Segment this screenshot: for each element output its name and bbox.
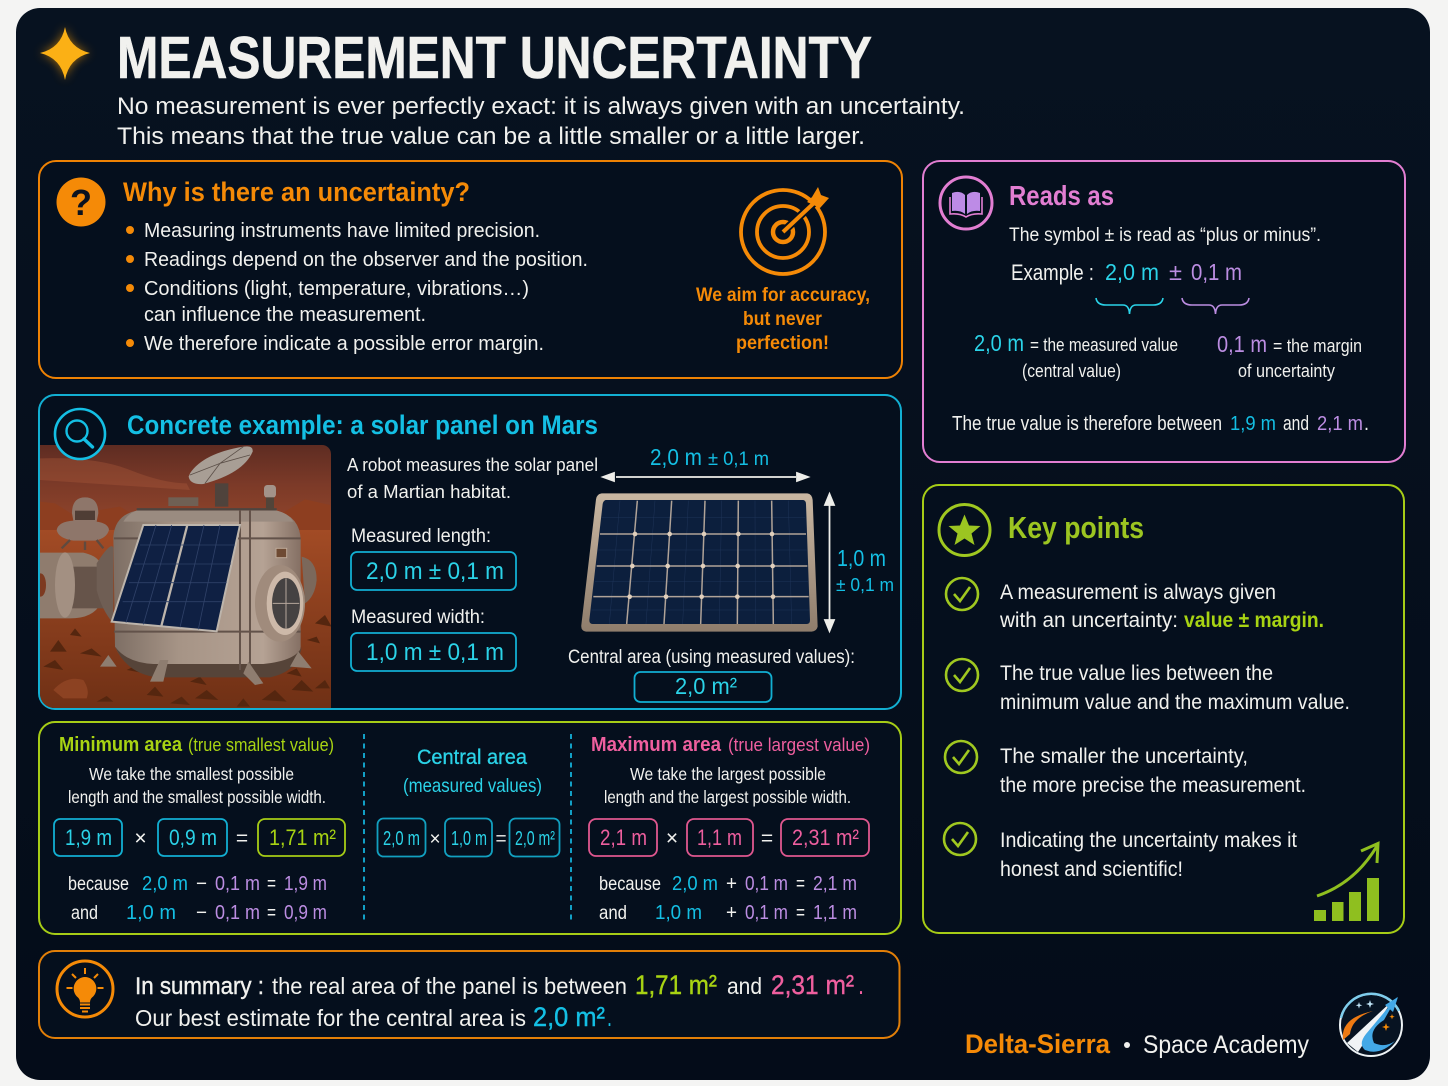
brace: margin xyxy=(1182,298,1249,314)
column: maximum area: = xyxy=(796,902,805,924)
icon: magnifier xyxy=(55,409,105,459)
column: central area: 2,0 m² xyxy=(515,828,555,850)
column: maximum area: 2,1 m xyxy=(813,873,857,895)
panel: minimum, central and maximum area xyxy=(39,722,901,934)
example expression: 2,0 m xyxy=(1105,259,1159,285)
column: minimum area: × xyxy=(134,827,147,850)
key point 1: A measurement is always given xyxy=(1000,581,1276,604)
dimension label: length: ± 0,1 m xyxy=(708,448,769,470)
measured width: Measured width: xyxy=(351,607,485,628)
bullet list of causes: can influence the measurement. xyxy=(144,303,426,326)
true value conclusion: 2,1 m xyxy=(1317,412,1363,435)
icon: question mark xyxy=(56,178,106,226)
column dividers xyxy=(364,734,571,920)
panel: why is there an uncertainty xyxy=(39,161,902,378)
intro text xyxy=(117,93,965,150)
column: minimum area: 0,9 m xyxy=(169,825,217,850)
column: maximum area: 1,0 m xyxy=(655,902,702,924)
summary text: 1,71 m² xyxy=(635,970,717,1000)
column: maximum area: Maximum area xyxy=(591,733,722,756)
column: minimum area: = xyxy=(267,902,276,924)
true value conclusion: . xyxy=(1364,413,1369,435)
column: minimum area: 2,0 m xyxy=(142,873,188,895)
column: minimum area: 0,9 m xyxy=(284,902,327,924)
column: maximum area: × xyxy=(666,827,678,850)
key point 3 xyxy=(945,741,1306,797)
key point 3: the more precise the measurement. xyxy=(1000,774,1306,797)
column: central area xyxy=(378,746,560,856)
icon: question mark: ? xyxy=(70,182,92,223)
definition: measured value: = the measured value xyxy=(1030,334,1178,355)
example expression: ± xyxy=(1169,259,1182,285)
column: maximum area: 1,1 m xyxy=(697,825,742,850)
measured length: Measured length: xyxy=(351,526,491,547)
dimension label: width xyxy=(836,545,894,595)
dimension label: width: 1,0 m xyxy=(837,545,886,571)
summary text: . xyxy=(607,1002,612,1032)
column: minimum area: − xyxy=(196,873,207,895)
definition: margin of uncertainty: = the margin xyxy=(1273,335,1362,356)
column: maximum area: 0,1 m xyxy=(745,873,788,895)
rocks xyxy=(43,615,332,707)
summary text: 2,31 m² xyxy=(771,970,854,1000)
callout: accuracy xyxy=(696,284,870,354)
column: central area: Central area xyxy=(417,746,527,769)
column: maximum area xyxy=(589,733,870,924)
small background module xyxy=(57,497,109,550)
callout: accuracy: but never xyxy=(743,308,822,330)
definition: measured value xyxy=(974,330,1178,381)
central area result xyxy=(568,647,855,702)
panel: key points xyxy=(923,485,1404,933)
column: minimum area: 1,9 m xyxy=(65,825,112,850)
column: central area: 1,0 m xyxy=(451,828,487,850)
callout: accuracy: We aim for accuracy, xyxy=(696,284,870,306)
summary text: . xyxy=(858,970,864,1000)
measured width: 1,0 m ± 0,1 m xyxy=(366,639,504,666)
column: maximum area: and xyxy=(599,903,627,924)
brace: measured value xyxy=(1096,298,1163,314)
column: maximum area: We take the largest possible xyxy=(630,764,826,784)
dimension label: width: ± 0,1 m xyxy=(836,574,894,595)
example expression: 0,1 m xyxy=(1191,259,1242,285)
column: central area: 2,0 m xyxy=(383,828,420,850)
column: maximum area: + xyxy=(726,873,737,895)
key point 1 xyxy=(946,578,1324,632)
column: minimum area: 1,9 m xyxy=(284,873,327,895)
key point 1: with an uncertainty: xyxy=(999,609,1178,632)
porthole xyxy=(255,565,305,642)
column: maximum area: (true largest value) xyxy=(728,734,870,755)
column: minimum area: (true smallest value) xyxy=(188,734,334,755)
example expression xyxy=(1011,259,1242,285)
illustration: Mars habitat with solar panel xyxy=(35,445,332,708)
column: minimum area: because xyxy=(68,874,129,895)
column: maximum area: because xyxy=(599,874,661,895)
column: maximum area: = xyxy=(761,827,773,850)
heading: reads as: Reads as xyxy=(1009,180,1114,211)
measured width xyxy=(351,607,516,671)
bullet list of causes xyxy=(126,219,588,355)
measured length: 2,0 m ± 0,1 m xyxy=(366,558,504,585)
measured length xyxy=(351,526,516,590)
panel: concrete example xyxy=(35,395,901,709)
definition: measured value: 2,0 m xyxy=(974,330,1024,356)
icon: target with arrow xyxy=(741,187,829,274)
column: minimum area: Minimum area xyxy=(59,733,183,756)
definition: margin of uncertainty xyxy=(1217,331,1362,381)
icon: rising bar chart xyxy=(1314,844,1379,921)
central area result: Central area (using measured values): xyxy=(568,647,855,668)
column: maximum area: 2,1 m xyxy=(600,825,647,850)
intro text: No measurement is ever perfectly exact: it is always given with an uncertainty. xyxy=(117,93,965,120)
column: central area: = xyxy=(495,829,507,850)
column: maximum area: length and the largest possible width. xyxy=(604,787,851,807)
key point 2: minimum value and the maximum value. xyxy=(1000,691,1350,714)
column: minimum area: length and the smallest possible width. xyxy=(68,787,326,807)
logo: rocket badge xyxy=(1340,994,1402,1056)
key point 2 xyxy=(946,659,1350,714)
icon: gold four-point star xyxy=(40,27,90,80)
true value conclusion: The true value is therefore between xyxy=(952,413,1222,435)
column: minimum area: We take the smallest possible xyxy=(89,764,294,784)
summary text: the real area of the panel is between xyxy=(272,973,627,999)
bullet list of causes: Conditions (light, temperature, vibrations…) xyxy=(144,277,529,300)
solar panel on habitat xyxy=(112,525,240,631)
key point 2: The true value lies between the xyxy=(1000,662,1273,685)
column: minimum area: and xyxy=(71,903,98,924)
column: maximum area: 2,31 m² xyxy=(792,825,859,850)
summary text: Our best estimate for the central area is xyxy=(135,1005,526,1031)
column: minimum area: 0,1 m xyxy=(215,902,260,924)
column: central area: × xyxy=(429,829,441,850)
panel: summary xyxy=(39,951,900,1038)
roof antenna and dish xyxy=(168,446,276,510)
key point 3: The smaller the uncertainty, xyxy=(1000,745,1248,768)
definition: margin of uncertainty: 0,1 m xyxy=(1217,331,1267,357)
true value conclusion: and xyxy=(1283,413,1309,435)
heading: key points: Key points xyxy=(1008,511,1144,545)
icon: star badge xyxy=(939,504,990,556)
intro text: This means that the true value can be a little smaller or a little larger. xyxy=(117,123,865,150)
central area result: 2,0 m² xyxy=(675,673,737,699)
key point 1: value ± margin. xyxy=(1184,609,1324,632)
illustration: solar panel xyxy=(581,493,818,632)
title: MEASUREMENT UNCERTAINTY xyxy=(117,25,872,91)
definition: measured value: (central value) xyxy=(1022,360,1121,381)
main habitat body xyxy=(97,509,317,685)
arrow: width xyxy=(825,494,834,631)
column: minimum area: 1,71 m² xyxy=(269,825,336,850)
panel: reads as xyxy=(923,161,1405,462)
key point 4 xyxy=(944,823,1297,881)
heading: concrete example: Concrete example: a solar panel on Mars xyxy=(127,410,598,440)
callout: accuracy: perfection! xyxy=(736,332,829,354)
icon: light bulb xyxy=(57,961,113,1017)
text: robot description xyxy=(347,454,598,502)
true value conclusion: 1,9 m xyxy=(1230,412,1276,435)
summary text: and xyxy=(727,973,762,999)
column: maximum area: + xyxy=(726,902,737,924)
icon: open book xyxy=(940,177,992,229)
symbol explanation: The symbol ± is read as “plus or minus”. xyxy=(1009,225,1321,246)
text: robot description: A robot measures the solar panel xyxy=(347,454,598,475)
column: minimum area: = xyxy=(236,827,248,850)
dimension label: length: 2,0 m xyxy=(650,444,702,470)
summary text: In summary : xyxy=(135,973,264,1000)
column: central area: (measured values) xyxy=(403,775,542,797)
summary text: 2,0 m² xyxy=(533,1002,605,1032)
arrow: length xyxy=(603,473,808,481)
bullet list of causes: Measuring instruments have limited precision. xyxy=(144,219,540,242)
key point 4: honest and scientific! xyxy=(1000,858,1183,881)
footer brand: Delta-Sierra xyxy=(965,1029,1111,1059)
column: maximum area: 1,1 m xyxy=(813,902,857,924)
column: minimum area: 0,1 m xyxy=(215,873,260,895)
example expression: Example : xyxy=(1011,260,1094,285)
column: minimum area: 1,0 m xyxy=(126,902,176,924)
bullet list of causes: Readings depend on the observer and the position. xyxy=(144,248,588,271)
column: minimum area: − xyxy=(196,902,207,924)
definition: margin of uncertainty: of uncertainty xyxy=(1238,360,1336,381)
column: minimum area: = xyxy=(267,873,276,895)
footer brand: Space Academy xyxy=(1143,1031,1309,1059)
column: maximum area: = xyxy=(796,873,805,895)
text: robot description: of a Martian habitat. xyxy=(347,481,511,502)
dimension label: length xyxy=(650,444,769,470)
connecting tube xyxy=(40,552,104,618)
key point 4: Indicating the uncertainty makes it xyxy=(1000,829,1297,852)
heading: why: Why is there an uncertainty? xyxy=(123,177,470,207)
bullet list of causes: We therefore indicate a possible error margin. xyxy=(144,332,544,355)
column: maximum area: 2,0 m xyxy=(672,873,718,895)
footer brand xyxy=(965,1029,1309,1059)
column: maximum area: 0,1 m xyxy=(745,902,788,924)
summary text xyxy=(135,970,864,1032)
column: minimum area xyxy=(54,733,345,924)
